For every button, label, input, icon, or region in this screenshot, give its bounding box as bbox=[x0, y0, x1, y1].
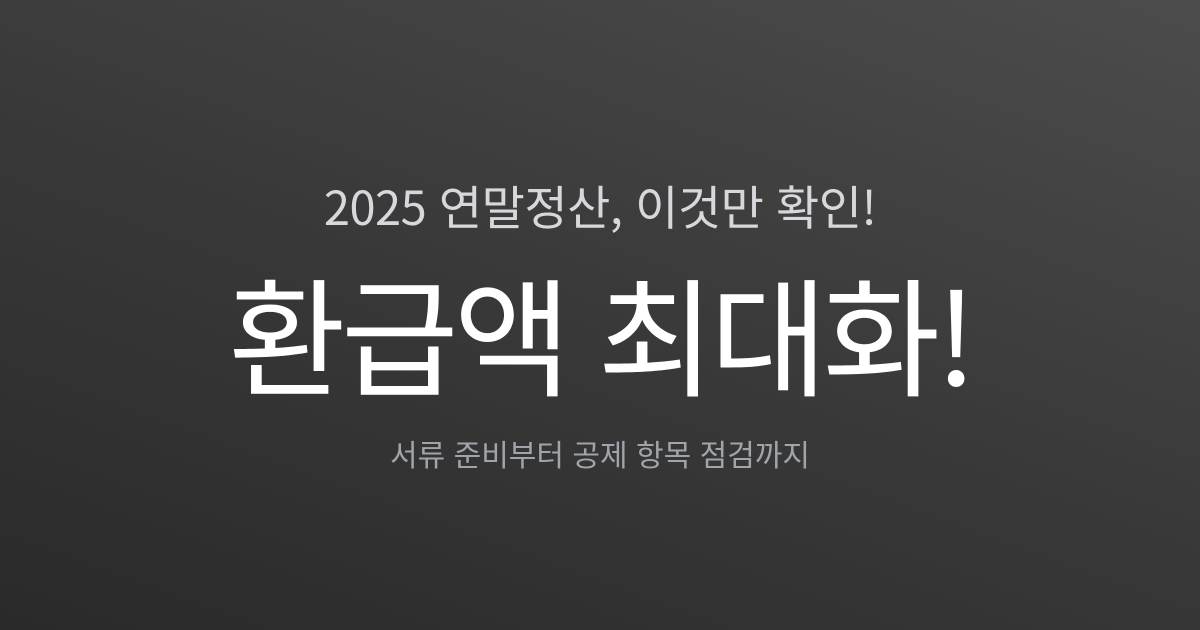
kicker heading: 2025 연말정산, 이것만 확인! bbox=[324, 170, 876, 239]
main title: 환급액 최대화! bbox=[228, 238, 972, 423]
subtitle: 서류 준비부터 공제 항목 점검까지 bbox=[390, 431, 810, 475]
